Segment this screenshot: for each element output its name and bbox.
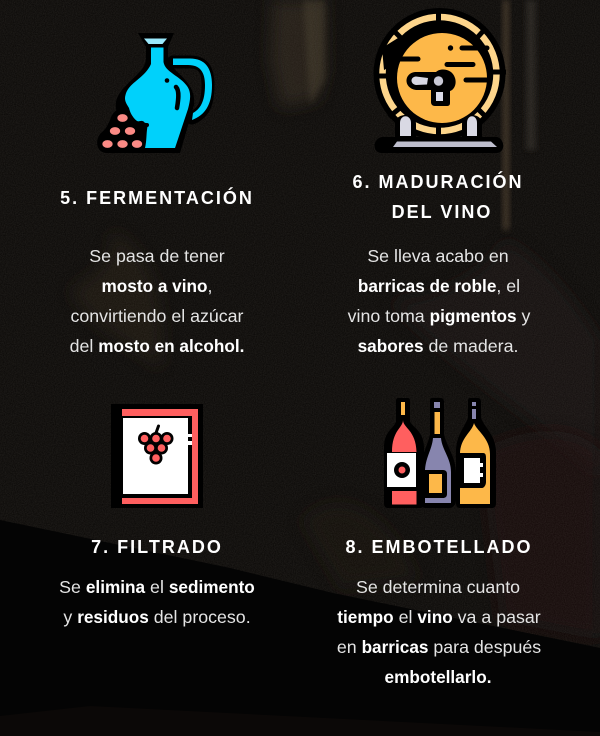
text block: fermentación: Se pasa de tener: [89, 246, 225, 266]
text line: mosto a vino,: [102, 276, 212, 296]
icon: wine barrel: [374, 8, 506, 153]
text line: en barricas para después: [337, 637, 541, 657]
text block: embotellado: Se determina cuanto: [356, 577, 520, 597]
text line: del mosto en alcohol.: [70, 336, 244, 356]
text line: y residuos del proceso.: [63, 607, 251, 627]
text line: convirtiendo el azúcar: [71, 306, 244, 326]
text line: barricas de roble, el: [358, 276, 520, 296]
text line: sabores de madera.: [358, 336, 518, 356]
text block: maduración: Se lleva acabo en: [367, 246, 509, 266]
icon: wine jug with grapes: [97, 33, 212, 153]
text line: embotellarlo.: [385, 667, 491, 687]
heading: 5. Fermentación: 5. FERMENTACIÓN: [60, 187, 254, 208]
text line: tiempo el vino va a pasar: [337, 607, 541, 627]
heading line 2: DEL VINO: [392, 202, 492, 222]
icon: three wine bottles: [384, 398, 496, 508]
heading: 8. Embotellado: 8. EMBOTELLADO: [345, 537, 533, 557]
icon: filter with grapes: [111, 404, 203, 508]
heading: 6. Maduración del vino: 6. MADURACIÓN: [352, 171, 524, 192]
text block: filtrado: Se elimina el sedimento: [59, 577, 255, 597]
heading: 7. Filtrado: 7. FILTRADO: [91, 537, 223, 557]
text line: vino toma pigmentos y: [348, 306, 530, 326]
